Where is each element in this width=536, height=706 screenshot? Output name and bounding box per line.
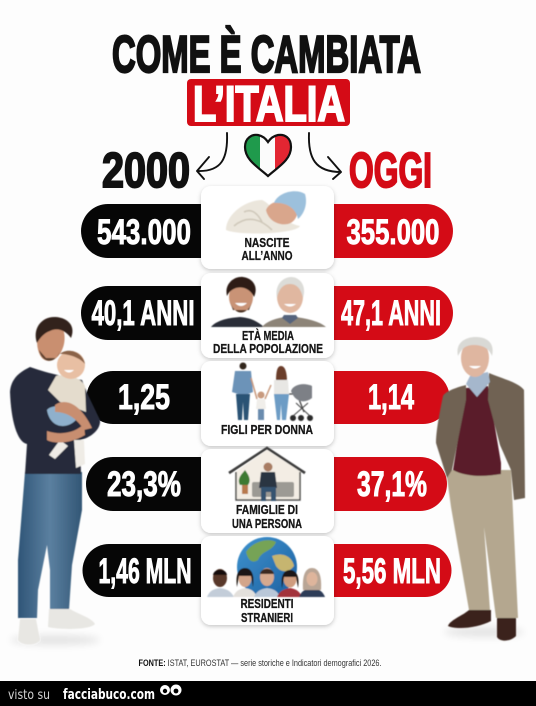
row 4: black pill: [86, 457, 201, 511]
source note: FONTE: ISTAT, EUROSTAT — serie storiche e Indicatori demografici 2026.: [138, 658, 382, 669]
shoe left: [448, 610, 491, 628]
row 2: black pill: 40,1 ANNI: [92, 294, 194, 333]
panel: eta media: DELLA POPOLAZIONE: [213, 341, 323, 356]
row 4: red pill: [334, 457, 447, 511]
shoe right: [497, 618, 516, 641]
row 3: black pill: 1,25: [118, 378, 170, 417]
row 5: black pill: 1,46 MLN: [98, 552, 192, 591]
footer bar: facciabuco.com: [63, 687, 155, 703]
panel: residenti stranieri: STRANIERI: [241, 610, 293, 625]
arrow: left: [197, 133, 227, 179]
row 3: red pill: 1,14: [368, 378, 414, 417]
panel: figli per donna: FIGLI PER DONNA: [221, 422, 313, 437]
icon: family with stroller: [232, 362, 313, 421]
icon: newborn baby: [226, 191, 306, 233]
footer bar: visto su: [8, 688, 50, 703]
icon: house with person: [229, 448, 305, 501]
sweater: [453, 386, 501, 476]
row 2: red pill: 47,1 ANNI: [341, 294, 441, 333]
icon: globe and people: [207, 537, 325, 597]
figure: young father with baby: [10, 317, 100, 645]
sneaker left: [18, 619, 40, 644]
panel: nascite: ALL’ANNO: [242, 248, 293, 263]
row 1: black pill: 543.000: [97, 213, 191, 252]
panel: eta media: ETÀ MEDIA: [242, 328, 294, 343]
row 4: red pill: 37,1%: [357, 465, 427, 504]
row 1: red pill: [334, 204, 453, 258]
jeans: [18, 472, 82, 618]
icon: eyes logo: [160, 684, 182, 696]
trousers: [446, 470, 518, 618]
collar: [466, 372, 490, 397]
baby top: [48, 375, 86, 412]
baby jeans: [47, 406, 76, 426]
panel: nascite: NASCITE: [244, 235, 290, 250]
sneaker right: [48, 609, 95, 629]
father head: [37, 322, 65, 361]
hair: [36, 317, 73, 343]
row 5: black pill: [83, 544, 201, 597]
baby head: [57, 351, 85, 379]
jacket left: [436, 385, 466, 478]
row 2: red pill: [334, 286, 453, 340]
baby hair: [60, 351, 85, 364]
beard and smile: [39, 350, 60, 361]
panel: famiglie di una persona: FAMIGLIE DI: [236, 502, 298, 517]
heading: oggi: OGGI: [349, 144, 432, 198]
panel: residenti stranieri: [201, 536, 334, 625]
panel: eta media: [201, 273, 334, 358]
baby mouth: [64, 370, 74, 372]
panel: famiglie di una persona: UNA PERSONA: [232, 516, 302, 531]
row 1: red pill: 355.000: [346, 213, 440, 252]
row 3: black pill: [87, 371, 201, 424]
icon: italian heart: [244, 132, 292, 178]
row 5: red pill: [334, 544, 452, 597]
smile: [469, 366, 481, 368]
baby legs: [49, 440, 85, 468]
jacket right: [488, 373, 525, 500]
panel: figli per donna: [201, 361, 334, 446]
footer bar: [0, 681, 536, 706]
title: [112, 26, 421, 132]
arrow: right: [309, 133, 341, 179]
panel: famiglie di una persona: [201, 448, 334, 533]
figure: elderly man: [436, 337, 525, 641]
row 1: black pill: [81, 204, 201, 258]
row 4: black pill: 23,3%: [107, 465, 181, 504]
row 2: black pill: [81, 286, 201, 340]
icon: young and old man: [211, 277, 326, 327]
row 3: red pill: [334, 371, 450, 424]
head: [461, 339, 489, 377]
hair: [457, 337, 493, 356]
row 5: red pill: 5,56 MLN: [343, 552, 441, 591]
sweater: [10, 367, 100, 474]
forearm lower: [47, 424, 85, 443]
title: L’ITALIA: [193, 76, 345, 132]
forearm upper: [55, 402, 92, 430]
panel: nascite: [201, 186, 334, 269]
heading: 2000: 2000: [102, 144, 190, 198]
panel: residenti stranieri: RESIDENTI: [240, 596, 294, 611]
